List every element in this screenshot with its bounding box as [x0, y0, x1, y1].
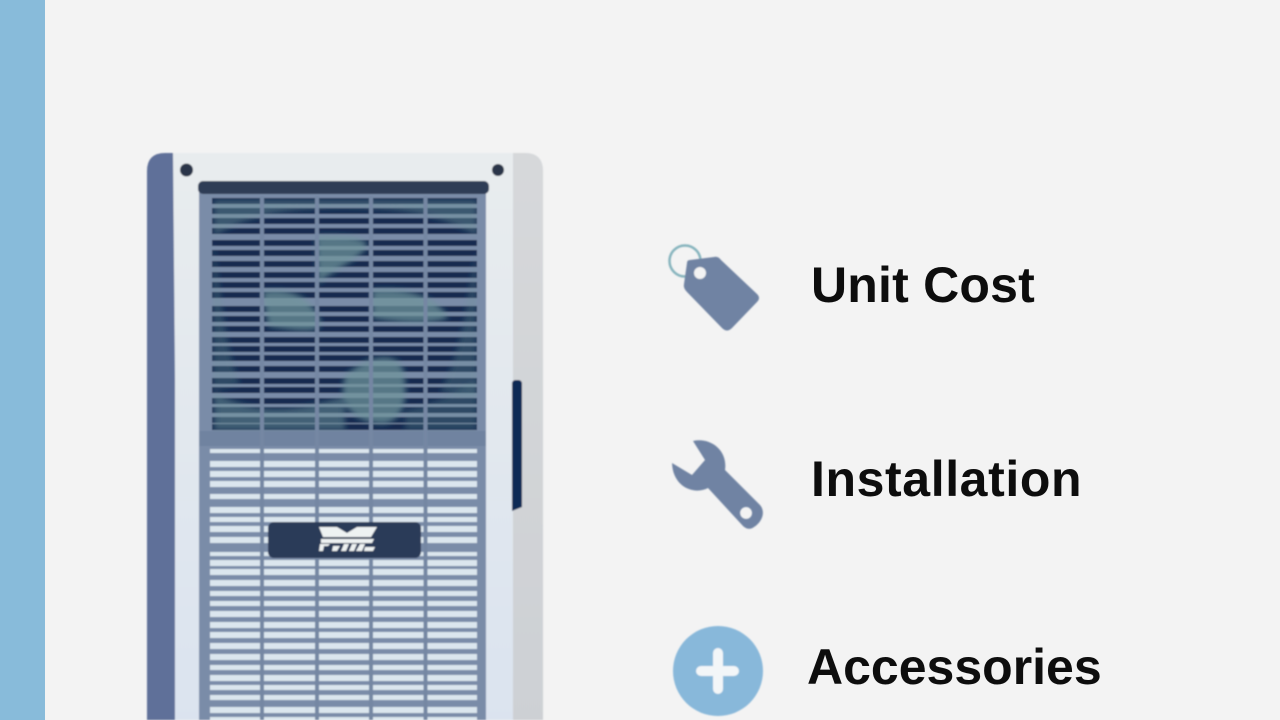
label: Accessories: Accessories [807, 639, 1102, 695]
icon: wrench [672, 440, 763, 529]
top dark bar [198, 181, 489, 194]
air conditioner unit illustration [147, 153, 543, 720]
icon: plus circle [673, 626, 763, 716]
badge logo mark [319, 527, 377, 551]
icon: price tag [670, 246, 759, 330]
left accent bar [0, 0, 45, 720]
grille vertical dividers [260, 196, 428, 720]
fan window slats [212, 198, 477, 430]
item: accessories [673, 626, 1102, 716]
right side panel [513, 153, 543, 720]
screws [180, 164, 504, 176]
fan blades seen through slats [213, 200, 477, 430]
item: installation [672, 440, 1082, 529]
label: Unit Cost: Unit Cost [811, 257, 1035, 313]
item: unit cost [670, 246, 1035, 330]
band below fan [199, 431, 486, 446]
left side panel [147, 153, 175, 720]
right side slot [512, 380, 522, 511]
brand badge [268, 522, 421, 558]
lower vent slats [210, 449, 477, 720]
unit body [147, 153, 543, 720]
grille panel [199, 190, 486, 720]
label: Installation: Installation [811, 451, 1082, 507]
